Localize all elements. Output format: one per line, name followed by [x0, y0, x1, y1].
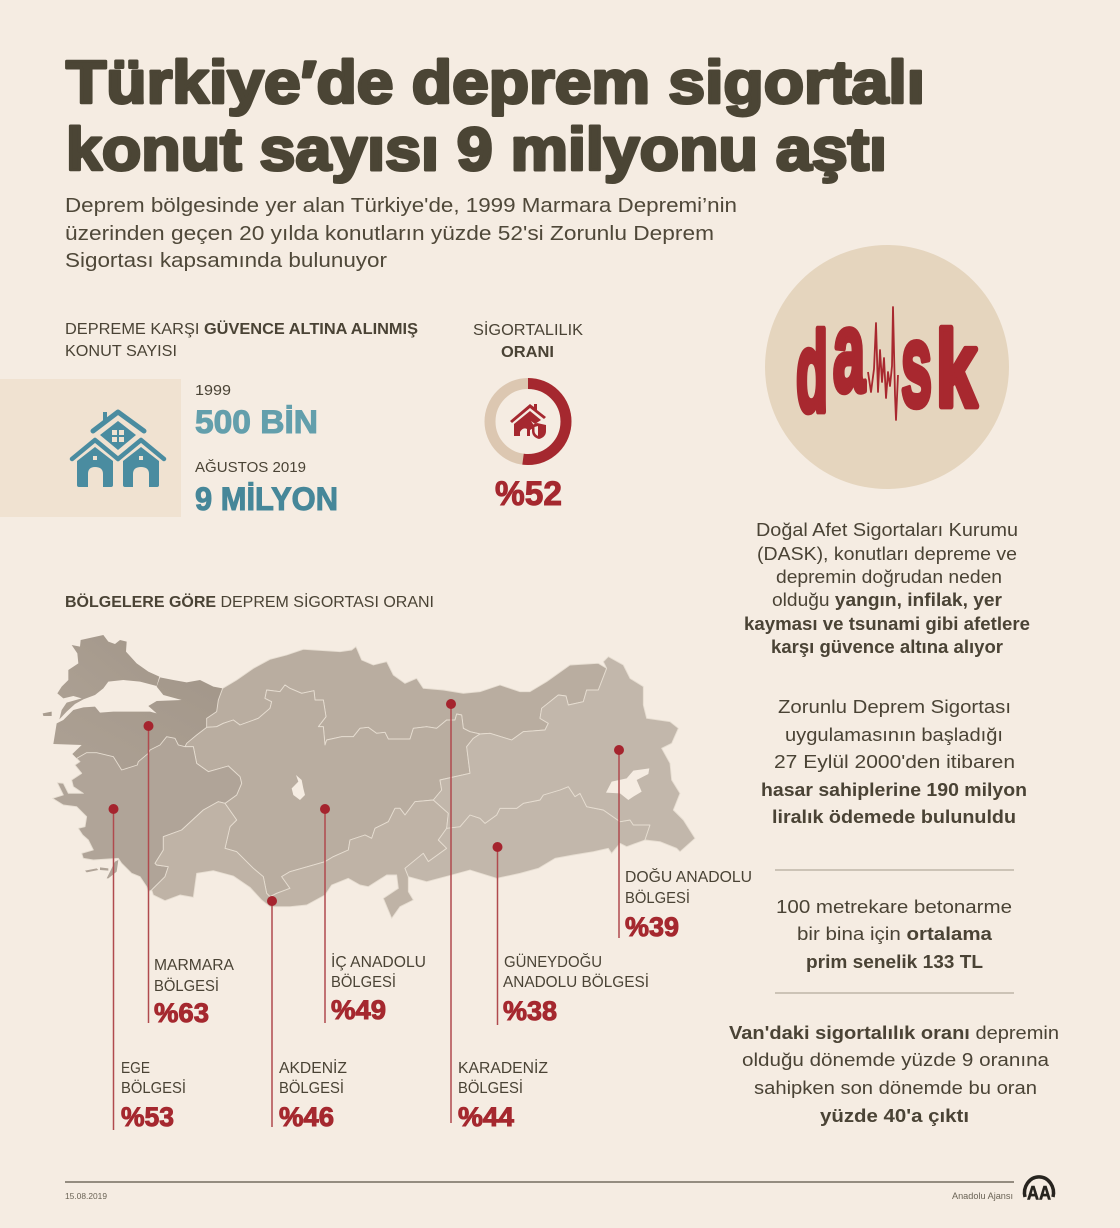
text block: DASK description: olduğu yangın, infilak, yer: [772, 590, 1002, 610]
lake: Van: [606, 768, 649, 800]
text block: DASK description: kayması ve tsunami gibi afetlere: [744, 614, 1030, 634]
seismic wave: [868, 307, 898, 420]
stat: 1999: [195, 382, 318, 440]
pin: Güneydoğu Anadolu: %38: [503, 996, 557, 1026]
panel: homes band: [0, 379, 181, 517]
footer: [65, 1182, 1014, 1201]
heading: by region: BÖLGELERE GÖRE DEPREM SİGORTASI ORANI: [65, 592, 434, 611]
intro text: Sigortası kapsamında bulunuyor: [65, 250, 387, 272]
text block: payments: 27 Eylül 2000'den itibaren: [774, 752, 1015, 772]
stat: 1999: 500 BİN: [195, 404, 318, 440]
lake: Tuz: [292, 775, 305, 800]
pin: Marmara: BÖLGESİ: [154, 976, 219, 995]
heading: insured homes: KONUT SAYISI: [65, 343, 177, 360]
pin: Doğu Anadolu: %39: [625, 912, 679, 942]
islands: Aegean: [85, 860, 118, 878]
icon: houses: [72, 412, 164, 487]
pin: Akdeniz: [267, 896, 347, 1132]
footer: 15.08.2019: [65, 1191, 107, 1201]
pin: Akdeniz: %46: [279, 1102, 334, 1132]
pin: Güneydoğu Anadolu: [492, 842, 649, 1026]
pin: İç Anadolu: [320, 804, 426, 1025]
logo: Anadolu Ajansi: AA: [1027, 1184, 1051, 1204]
heading: insurance rate: ORANI: [501, 344, 554, 361]
pin: Marmara: %63: [154, 998, 209, 1028]
pin: Marmara: MARMARA: [154, 957, 234, 974]
text block: payments: uygulamasının başladığı: [785, 725, 1003, 745]
text block: Van: Van'daki sigortalılık oranı depremin: [729, 1023, 1059, 1043]
heading: insurance rate: [473, 320, 583, 361]
logo: DASK circle: s: [901, 300, 932, 432]
logo: Anadolu Ajansi: [1024, 1177, 1054, 1204]
region: Marmara: [43, 635, 223, 770]
map: Turkey regions: [43, 635, 695, 918]
region: Guneydogu: [405, 787, 650, 882]
logo: DASK circle: [765, 245, 1009, 489]
pin: Akdeniz: AKDENİZ: [279, 1058, 347, 1077]
text block: Van: [729, 1023, 1059, 1126]
pin: Ege: [108, 804, 186, 1132]
text block: Van: sahipken son dönemde bu oran: [754, 1078, 1037, 1098]
pin: Ege: %53: [121, 1102, 174, 1132]
pin: Doğu Anadolu: DOĞU ANADOLU: [625, 867, 752, 886]
logo: DASK circle: a: [833, 289, 866, 416]
heading: insurance rate: SİGORTALILIK: [473, 320, 583, 339]
pin: Ege: EGE: [121, 1060, 150, 1077]
stat: 2019: AĞUSTOS 2019: [195, 459, 306, 476]
region: Dogu: [433, 657, 695, 852]
pin: Marmara: [144, 721, 234, 1028]
pin: Güneydoğu Anadolu: ANADOLU BÖLGESİ: [503, 972, 649, 991]
text block: payments: liralık ödemede bulunuldu: [772, 807, 1016, 827]
title: Türkiye′de deprem sigortalı: [66, 49, 925, 116]
pin: Karadeniz: [446, 699, 548, 1132]
heading: insured homes: [65, 319, 418, 360]
title: [66, 49, 925, 183]
intro text: Deprem bölgesinde yer alan Türkiye'de, 1999 Marmara Depremi’nin: [65, 195, 737, 217]
pin: İç Anadolu: %49: [331, 995, 386, 1025]
text block: DASK description: karşı güvence altına alıyor: [771, 637, 1003, 657]
text block: DASK description: (DASK), konutları depreme ve: [757, 544, 1017, 564]
icon: house with shield: [510, 404, 546, 439]
text block: premium: 100 metrekare betonarme: [776, 897, 1012, 917]
text block: DASK description: [744, 520, 1030, 657]
pin: Akdeniz: BÖLGESİ: [279, 1078, 344, 1097]
region: Ic Anadolu: [185, 685, 480, 897]
text block: Van: yüzde 40'a çıktı: [820, 1106, 969, 1126]
stat: 1999: 1999: [195, 382, 231, 399]
text block: payments: hasar sahiplerine 190 milyon: [761, 780, 1027, 800]
pin: Güneydoğu Anadolu: GÜNEYDOĞU: [504, 952, 602, 971]
text block: payments: Zorunlu Deprem Sigortası: [778, 697, 1011, 717]
text block: DASK description: depremin doğrudan neden: [776, 567, 1002, 587]
region: Ege: [53, 737, 242, 892]
donut chart: 52%: [490, 384, 566, 460]
stat: 52 percent: %52: [495, 475, 562, 513]
text block: premium: [776, 897, 1012, 972]
pin: Karadeniz: KARADENİZ: [458, 1058, 548, 1077]
intro text: üzerinden geçen 20 yılda konutların yüzde 52'si Zorunlu Deprem: [65, 223, 714, 245]
region: Akdeniz: [152, 800, 448, 918]
pin: Ege: BÖLGESİ: [121, 1078, 186, 1097]
text block: Van: olduğu dönemde yüzde 9 oranına: [742, 1050, 1050, 1070]
text block: premium: bir bina için ortalama: [797, 924, 993, 944]
pin: Karadeniz: BÖLGESİ: [458, 1078, 523, 1097]
footer: Anadolu Ajansı: [952, 1191, 1013, 1201]
text block: DASK description: Doğal Afet Sigortaları Kurumu: [756, 520, 1018, 540]
stat: 2019: 9 MİLYON: [195, 481, 338, 517]
logo: DASK circle: d: [796, 309, 828, 435]
pin: Karadeniz: %44: [458, 1102, 514, 1132]
text block: payments: [761, 697, 1027, 827]
pin: Doğu Anadolu: [614, 745, 752, 942]
stat: 2019: [195, 459, 338, 517]
intro text: [65, 195, 737, 272]
pin: İç Anadolu: BÖLGESİ: [331, 972, 396, 991]
region: Karadeniz: [207, 647, 607, 745]
title: konut sayısı 9 milyonu aştı: [66, 116, 887, 183]
pin: İç Anadolu: İÇ ANADOLU: [331, 952, 426, 971]
heading: insured homes: DEPREME KARŞI GÜVENCE ALTINA ALINMIŞ: [65, 319, 418, 338]
pin: Doğu Anadolu: BÖLGESİ: [625, 888, 690, 907]
text block: premium: prim senelik 133 TL: [806, 952, 983, 972]
logo: DASK circle: k: [936, 308, 978, 429]
